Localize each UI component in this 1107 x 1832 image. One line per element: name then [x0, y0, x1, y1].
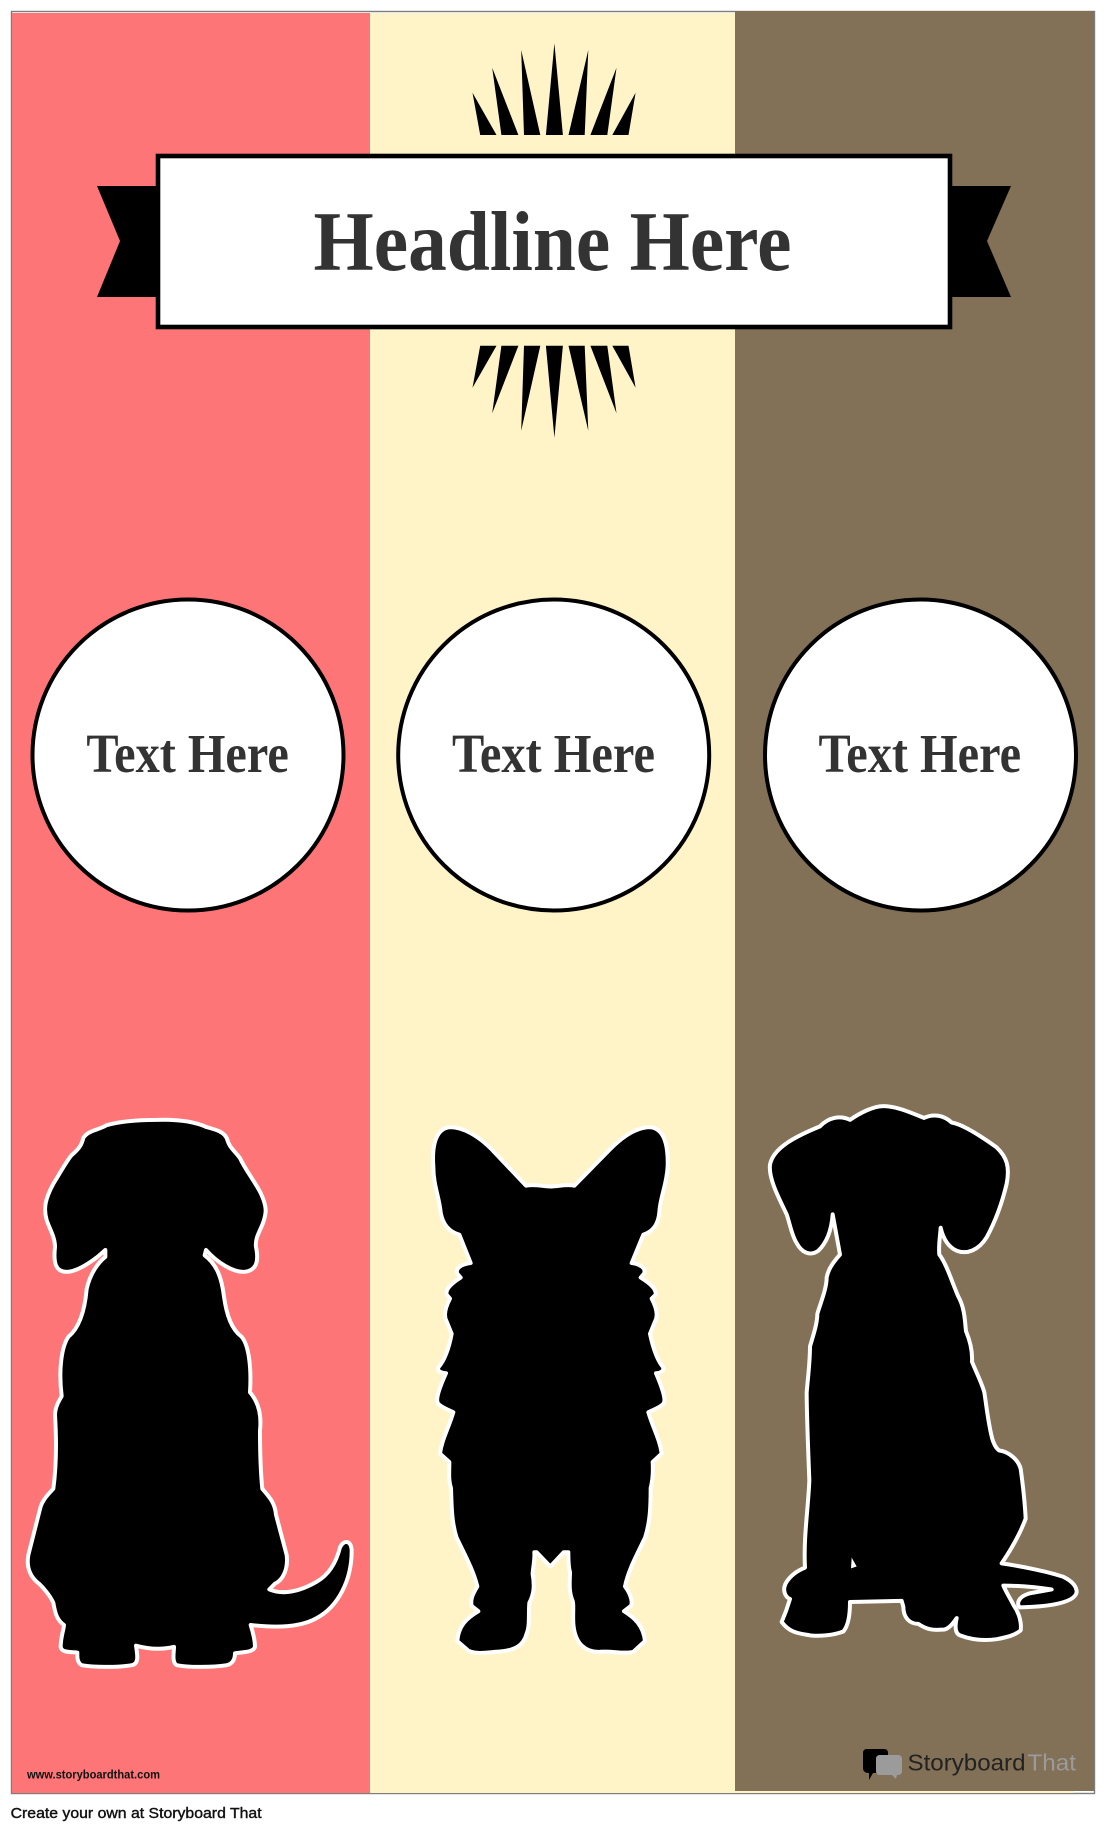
icon: bottom sunburst rays: [472, 346, 636, 438]
panel: cream column: [370, 13, 1074, 1793]
circle 2 text: Text Here: [452, 723, 655, 784]
logo wordmark: Storyboard: [908, 1750, 1026, 1776]
circle 1: [32, 600, 344, 910]
icon: top sunburst rays: [472, 43, 636, 135]
logo: Storyboard That: [863, 1749, 1076, 1780]
panel: brown column: [735, 11, 1094, 1791]
website text: www.storyboardthat.com: [26, 1770, 160, 1782]
title: Headline Here: [314, 195, 792, 289]
circle 3: [765, 600, 1076, 910]
headline banner: [158, 156, 950, 327]
circle 3 text: Text Here: [818, 723, 1021, 784]
icon: dog silhouette right: [770, 1106, 1077, 1640]
footer caption: Create your own at Storyboard That: [11, 1806, 262, 1822]
panel: red column: [12, 13, 370, 1793]
circle 1 text: Text Here: [86, 723, 289, 784]
circle 2: [398, 600, 709, 910]
icon: speech bubbles: [863, 1749, 902, 1780]
ribbon: left tail: [97, 186, 158, 297]
ribbon: right tail: [950, 186, 1011, 297]
icon: dog silhouette middle: [433, 1127, 668, 1653]
icon: dog silhouette left: [28, 1120, 352, 1667]
logo wordmark: That: [1028, 1750, 1076, 1776]
